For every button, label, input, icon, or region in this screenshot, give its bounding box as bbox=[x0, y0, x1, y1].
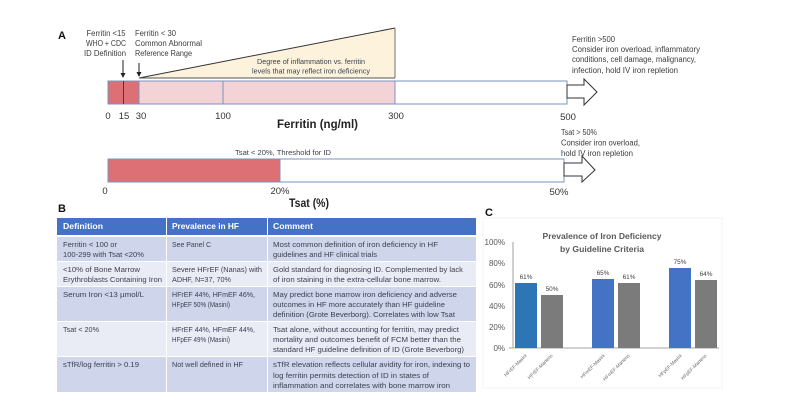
table row: ferritin definition bbox=[57, 237, 476, 261]
table row: bone marrow: ADHF, N=37, 70% bbox=[172, 277, 231, 284]
table row: Tsat: mortality and outcomes benefit of FCM better than the bbox=[273, 337, 461, 344]
ferritin scale bar bbox=[108, 81, 567, 104]
table row: ferritin definition: 100-299 with Tsat <20% bbox=[63, 252, 144, 259]
ferritin tick labels: 15 bbox=[119, 111, 129, 122]
y axis: 0% bbox=[493, 344, 505, 353]
table row: serum iron: outcomes in HF more accurately than HF guideline bbox=[273, 302, 445, 309]
table row: bone marrow: Erythroblasts Containing Iron bbox=[63, 277, 162, 284]
y axis: 100% bbox=[485, 238, 505, 247]
panel B: definitions table bbox=[57, 203, 476, 392]
callout: ferritin above 500 bbox=[572, 35, 700, 75]
table row: bone marrow: <10% of Bone Marrow bbox=[63, 267, 141, 274]
Tsat axis title: Tsat (%) bbox=[289, 198, 329, 210]
arrow: ferritin above 500 bbox=[567, 79, 597, 105]
callout: ferritin above 500: Ferritin >500 bbox=[572, 35, 616, 44]
callout: ferritin under 30: Ferritin < 30 bbox=[135, 29, 177, 38]
table header row bbox=[57, 218, 476, 235]
bars: HFrEF: 50% bbox=[546, 286, 559, 293]
callout: Tsat above 50: Consider iron overload, bbox=[561, 138, 640, 148]
x axis labels: HFrEF-Masini bbox=[503, 353, 528, 378]
bars: HFmEF bbox=[592, 270, 640, 348]
Tsat tick labels bbox=[102, 186, 569, 198]
arrow: to ferritin 15 bbox=[120, 60, 126, 78]
label C: C bbox=[485, 207, 493, 219]
table row: Tsat: Tsat < 20% bbox=[63, 327, 99, 334]
label B: B bbox=[58, 203, 66, 215]
x axis labels: HFmEF-Masini bbox=[580, 353, 606, 380]
table row: bone marrow: of iron staining in the extra-cellular bone marrow. bbox=[273, 277, 441, 284]
callout: ferritin under 15: ID Definition bbox=[84, 49, 126, 58]
table row: serum iron: May predict bone marrow iron deficiency and adverse bbox=[273, 292, 457, 299]
x axis labels: HFpEF-Masini bbox=[657, 353, 683, 379]
bars: HFpEF: 64% bbox=[700, 271, 713, 278]
callout: ferritin under 15: Ferritin <15 bbox=[86, 29, 126, 38]
table row: bone marrow: Severe HFrEF (Nanas) with bbox=[172, 267, 262, 274]
bars: HFpEF bbox=[669, 259, 717, 348]
inflammation wedge bbox=[139, 28, 395, 78]
table row: serum iron bbox=[57, 287, 476, 321]
y axis bbox=[485, 238, 719, 353]
Tsat tick labels: 0 bbox=[102, 186, 108, 197]
Tsat tick labels: 20% bbox=[270, 186, 290, 197]
table row: sTfR: sTfR/log ferritin > 0.19 bbox=[63, 362, 139, 369]
arrow: Tsat above 50 bbox=[564, 156, 595, 182]
table row: Tsat: standard HF guideline definition of ID (Grote Beverborg) bbox=[273, 347, 464, 354]
callout: ferritin under 30 bbox=[135, 29, 202, 58]
inflammation wedge: levels that may reflect iron deficiency bbox=[252, 68, 371, 76]
label A: A bbox=[58, 30, 66, 42]
table row: Tsat: HFpEF 49% (Masini) bbox=[172, 337, 230, 344]
table row: Tsat: Tsat alone, without accounting for ferritin, may predict bbox=[273, 327, 459, 334]
callout: ferritin above 500: conditions, cell damage, malignancy, bbox=[572, 55, 696, 64]
table row: sTfR: inflammation and correlates with bone marrow iron bbox=[273, 383, 450, 390]
y axis: 80% bbox=[489, 259, 505, 268]
table header row: Prevalence in HF bbox=[172, 221, 239, 231]
table row: bone marrow bbox=[57, 262, 476, 286]
y axis: 60% bbox=[489, 281, 505, 290]
table header row: Definition bbox=[63, 221, 103, 231]
x axis labels: HFpEF-Martens bbox=[680, 353, 709, 382]
ferritin axis title: Ferritin (ng/ml) bbox=[277, 119, 358, 131]
callout: ferritin under 30: Reference Range bbox=[135, 49, 192, 58]
ferritin tick labels: 0 bbox=[105, 111, 111, 122]
arrow: to ferritin 30 bbox=[136, 63, 142, 77]
ferritin tick labels bbox=[105, 111, 576, 123]
callout: ferritin above 500: infection, hold IV iron repletion bbox=[572, 66, 678, 75]
y axis: 20% bbox=[489, 323, 505, 332]
table row: sTfR: sTfR elevation reflects cellular avidity for iron, indexing to bbox=[273, 362, 470, 369]
chart title bbox=[542, 231, 662, 254]
callout: Tsat above 50: Tsat > 50% bbox=[561, 128, 597, 137]
Tsat threshold label: Tsat < 20%, Threshold for ID bbox=[235, 150, 331, 157]
table row: sTfR: Not well defined in HF bbox=[172, 362, 243, 369]
table row: sTfR: log ferritin permits detection of ID in states of bbox=[273, 373, 429, 380]
callout: ferritin above 500: Consider iron overload, inflammatory bbox=[572, 45, 700, 54]
table row: ferritin definition: Ferritin < 100 or bbox=[63, 242, 118, 249]
table row: ferritin definition: See Panel C bbox=[172, 242, 211, 249]
callout: ferritin under 15 bbox=[84, 29, 126, 58]
bars: HFpEF: 75% bbox=[674, 259, 687, 266]
table row: ferritin definition: Most common definition of iron deficiency in HF bbox=[273, 242, 438, 249]
table row: serum iron: HFpEF 50% (Masini) bbox=[172, 302, 230, 309]
callout: Tsat above 50: hold IV iron repletion bbox=[561, 149, 633, 158]
inflammation wedge: Degree of inflammation vs. ferritin bbox=[257, 59, 365, 66]
bars: HFmEF: 61% bbox=[623, 274, 636, 281]
bars: HFrEF: 61% bbox=[520, 274, 533, 281]
ferritin tick labels: 100 bbox=[215, 111, 231, 122]
table row: serum iron: Serum Iron <13 µmol/L bbox=[63, 292, 144, 299]
table row: serum iron: HFrEF 44%, HFmEF 46%, bbox=[172, 292, 255, 299]
table row: sTfR bbox=[57, 357, 476, 392]
Tsat scale bar bbox=[108, 159, 564, 182]
table row: ferritin definition: guidelines and HF clinical trials bbox=[273, 252, 378, 259]
bars: HFrEF bbox=[515, 274, 563, 348]
panel A: ferritin and Tsat scales bbox=[58, 28, 700, 210]
chart title: by Guideline Criteria bbox=[560, 244, 644, 254]
table row: bone marrow: Gold standard for diagnosing ID. Complemented by lack bbox=[273, 267, 464, 274]
table row: Tsat: HFrEF 44%, HFmEF 44%, bbox=[172, 327, 255, 334]
table row: serum iron: definition (Grote Beverborg). Correlates with low Tsat bbox=[273, 312, 455, 319]
table header row: Comment bbox=[273, 221, 313, 231]
callout: ferritin under 30: Common Abnormal bbox=[135, 39, 202, 48]
ferritin tick labels: 30 bbox=[136, 111, 146, 122]
Tsat tick labels: 50% bbox=[549, 187, 569, 198]
chart frame bbox=[483, 218, 722, 388]
chart title: Prevalence of Iron Deficiency bbox=[542, 231, 662, 241]
panel C: prevalence bar chart bbox=[483, 207, 722, 388]
ferritin tick labels: 300 bbox=[388, 111, 404, 122]
y axis: 40% bbox=[489, 302, 505, 311]
bars: HFmEF: 65% bbox=[597, 270, 610, 277]
x axis labels: HFrEF-Martens bbox=[527, 353, 555, 381]
table row: Tsat bbox=[57, 322, 476, 356]
callout: Tsat above 50 bbox=[561, 128, 640, 158]
ferritin tick labels: 500 bbox=[560, 112, 576, 123]
x axis labels bbox=[503, 353, 709, 382]
x axis labels: HFmEF-Martens bbox=[602, 353, 632, 382]
callout: ferritin under 15: WHO + CDC bbox=[86, 39, 126, 48]
